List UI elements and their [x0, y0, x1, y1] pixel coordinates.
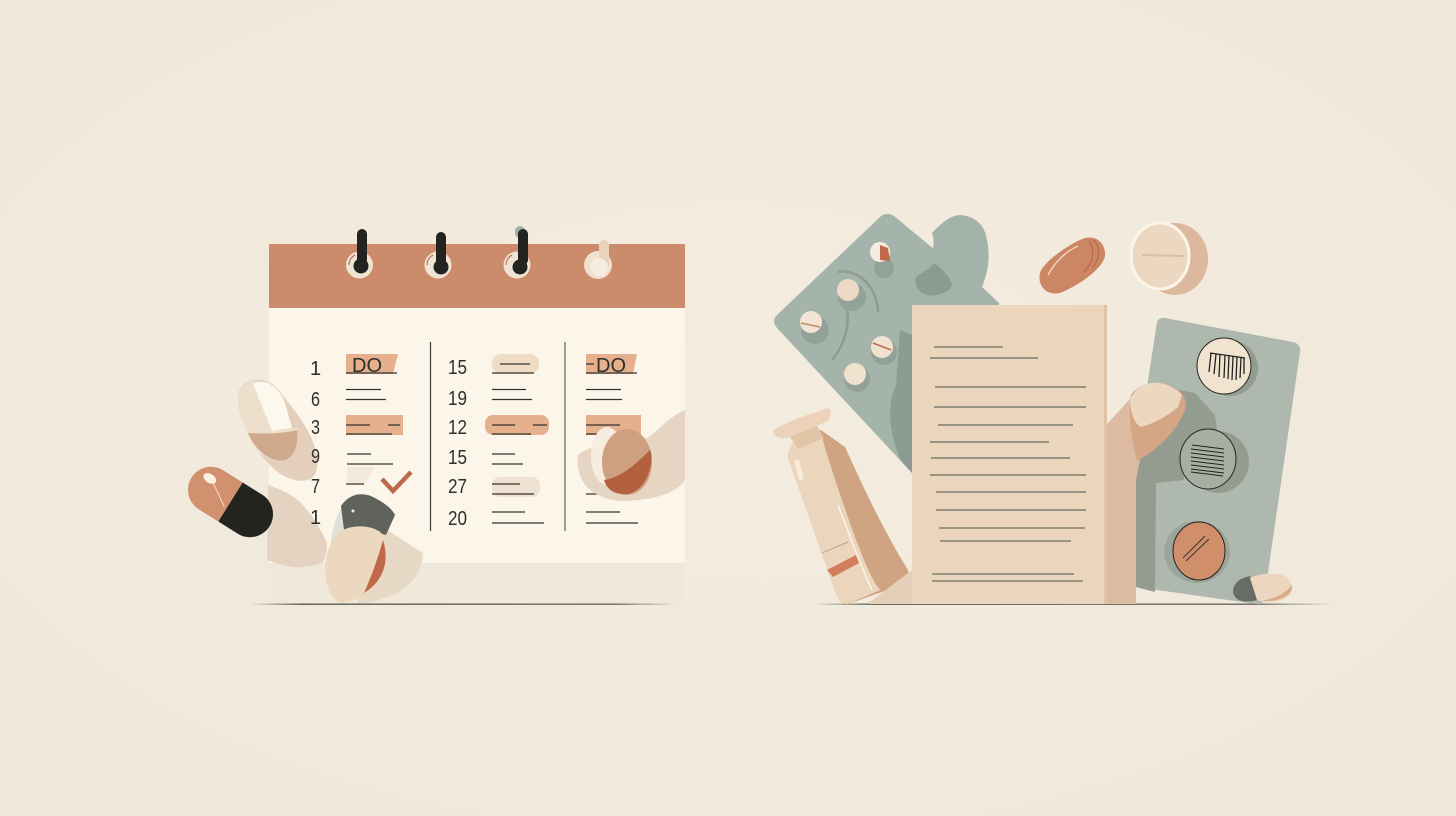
date numbers: column two	[448, 357, 467, 530]
lower smudge	[890, 330, 912, 473]
ground shadow under calendar	[269, 563, 685, 604]
blister pack: sage with pills	[774, 214, 999, 473]
pill disc: orange	[1164, 521, 1230, 583]
check mark	[382, 472, 411, 491]
date numbers: column one: 7	[311, 476, 320, 498]
prescription sheet	[912, 305, 1107, 604]
date numbers: column one: 1	[310, 507, 321, 529]
date numbers: column two: 19	[448, 388, 467, 410]
DO labels	[352, 355, 626, 377]
blister pills	[800, 242, 897, 392]
date numbers: column one	[310, 358, 321, 529]
date numbers: column two: 20	[448, 508, 467, 530]
date numbers: column one: 6	[311, 389, 320, 411]
small capsule: bottom right	[1233, 574, 1292, 602]
card shadow	[1117, 385, 1217, 592]
pill disc: barcode	[1197, 338, 1258, 396]
soft blob: lower left	[267, 485, 327, 567]
capsule: orange and black	[179, 458, 282, 546]
pill disc: grey	[1180, 429, 1249, 493]
ground shadow beside bottle	[870, 570, 912, 604]
calendar header band	[269, 244, 685, 308]
date numbers: column two: 15	[448, 447, 467, 469]
finger	[1107, 383, 1186, 604]
sage smudge	[912, 215, 999, 306]
binding rings	[346, 226, 612, 279]
date numbers: column one: 1	[310, 358, 321, 380]
tablet: calendar right	[578, 410, 685, 501]
highlight bars	[346, 354, 641, 497]
date numbers: column one: 3	[311, 417, 320, 439]
floating round tablet	[1131, 223, 1208, 295]
soft blob: behind bottom tablet	[357, 527, 423, 603]
date numbers: column two: 27	[448, 476, 467, 498]
blister card: right	[1117, 318, 1300, 604]
text lines	[930, 347, 1086, 581]
date numbers: column one: 9	[311, 446, 320, 468]
dark capsule	[330, 494, 395, 550]
date numbers: column two: 12	[448, 417, 467, 439]
schedule lines	[346, 364, 638, 523]
bottle	[774, 408, 908, 604]
smudge shadow	[915, 263, 952, 296]
DO labels: DO	[352, 355, 382, 377]
calendar	[269, 226, 685, 563]
ground line: left	[250, 604, 678, 605]
dividers	[430, 342, 565, 531]
calendar page	[269, 308, 685, 563]
tablet: bottom centre	[325, 526, 386, 603]
floating pill: orange	[1039, 237, 1105, 293]
date numbers: column two: 15	[448, 357, 467, 379]
DO labels: DO	[596, 355, 626, 377]
ground line: right	[812, 604, 1334, 605]
tablet: top left	[238, 380, 317, 481]
curved press marks	[832, 272, 878, 360]
